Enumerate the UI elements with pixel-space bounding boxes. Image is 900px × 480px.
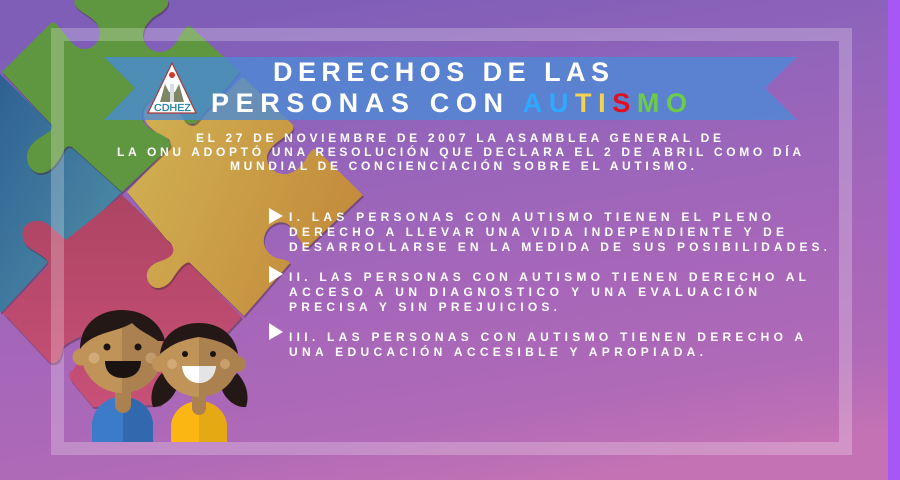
right II: PRECISA Y SIN PREJUICIOS. [289, 300, 557, 314]
title line 2: PERSONAS CON AUTISMO [211, 88, 687, 118]
girl head [160, 323, 238, 397]
puzzle graphic [0, 0, 363, 407]
puzzle piece: red [3, 195, 242, 407]
girl neck [192, 390, 206, 415]
puzzle piece: yellow [127, 77, 363, 316]
right I [289, 210, 827, 254]
translucent frame [51, 28, 852, 455]
right I: DESARROLLARSE EN LA MEDIDA DE SUS POSIBILIDADES. [289, 240, 827, 254]
icon: arrow 2 [269, 266, 283, 283]
girl hair [160, 323, 238, 354]
girl pigtails [151, 373, 176, 407]
boy cheeks [88, 352, 100, 364]
logo: CDHEZ [148, 63, 196, 114]
right I: DERECHO A LLEVAR UNA VIDA INDEPENDIENTE Y DE [289, 225, 784, 239]
logo triangle [148, 63, 196, 113]
boy eyes [104, 344, 110, 350]
icon: arrow 3 [269, 323, 283, 340]
intro paragraph: EL 27 DE NOVIEMBRE DE 2007 LA ASAMBLEA GENERAL DE [196, 131, 721, 145]
puzzle piece: green [2, 0, 240, 192]
boy neck [115, 388, 131, 413]
intro paragraph: MUNDIAL DE CONCIENCIACIÓN SOBRE EL AUTISMO. [230, 158, 694, 173]
girl smile [182, 366, 216, 383]
right II: II. LAS PERSONAS CON AUTISMO TIENEN DERECHO AL [289, 270, 806, 284]
girl eyes [182, 351, 188, 357]
right edge strip [888, 0, 900, 480]
right III: III. LAS PERSONAS CON AUTISMO TIENEN DERECHO A [289, 330, 803, 344]
right III [289, 330, 803, 359]
girl ears [152, 356, 168, 372]
logo label: CDHEZ [154, 103, 191, 114]
logo center figure [170, 84, 174, 102]
girl cheeks [167, 359, 177, 369]
boy mouth [105, 361, 141, 378]
title ribbon [104, 57, 797, 120]
right II [289, 270, 806, 314]
title [211, 57, 687, 118]
boy hair [80, 310, 165, 349]
boy ears [72, 348, 90, 366]
title line 1: DERECHOS DE LAS [273, 57, 609, 87]
boy head [81, 311, 163, 393]
girl body [171, 401, 227, 442]
boy body [92, 397, 153, 442]
puzzle piece: blue [0, 74, 122, 312]
intro paragraph [117, 131, 801, 173]
right II: ACCESO A UN DIAGNOSTICO Y UNA EVALUACIÓN [289, 284, 757, 299]
right I: I. LAS PERSONAS CON AUTISMO TIENEN EL PLENO [289, 210, 771, 224]
illustration: boy [72, 310, 168, 442]
logo figures [160, 84, 184, 102]
illustration: girl [151, 323, 248, 442]
icon: arrow 1 [269, 208, 283, 224]
intro paragraph: LA ONU ADOPTÓ UNA RESOLUCIÓN QUE DECLARA EL 2 DE ABRIL COMO DÍA [117, 144, 801, 159]
logo sun [169, 72, 175, 78]
right III: UNA EDUCACIÓN ACCESIBLE Y APROPIADA. [289, 344, 703, 359]
